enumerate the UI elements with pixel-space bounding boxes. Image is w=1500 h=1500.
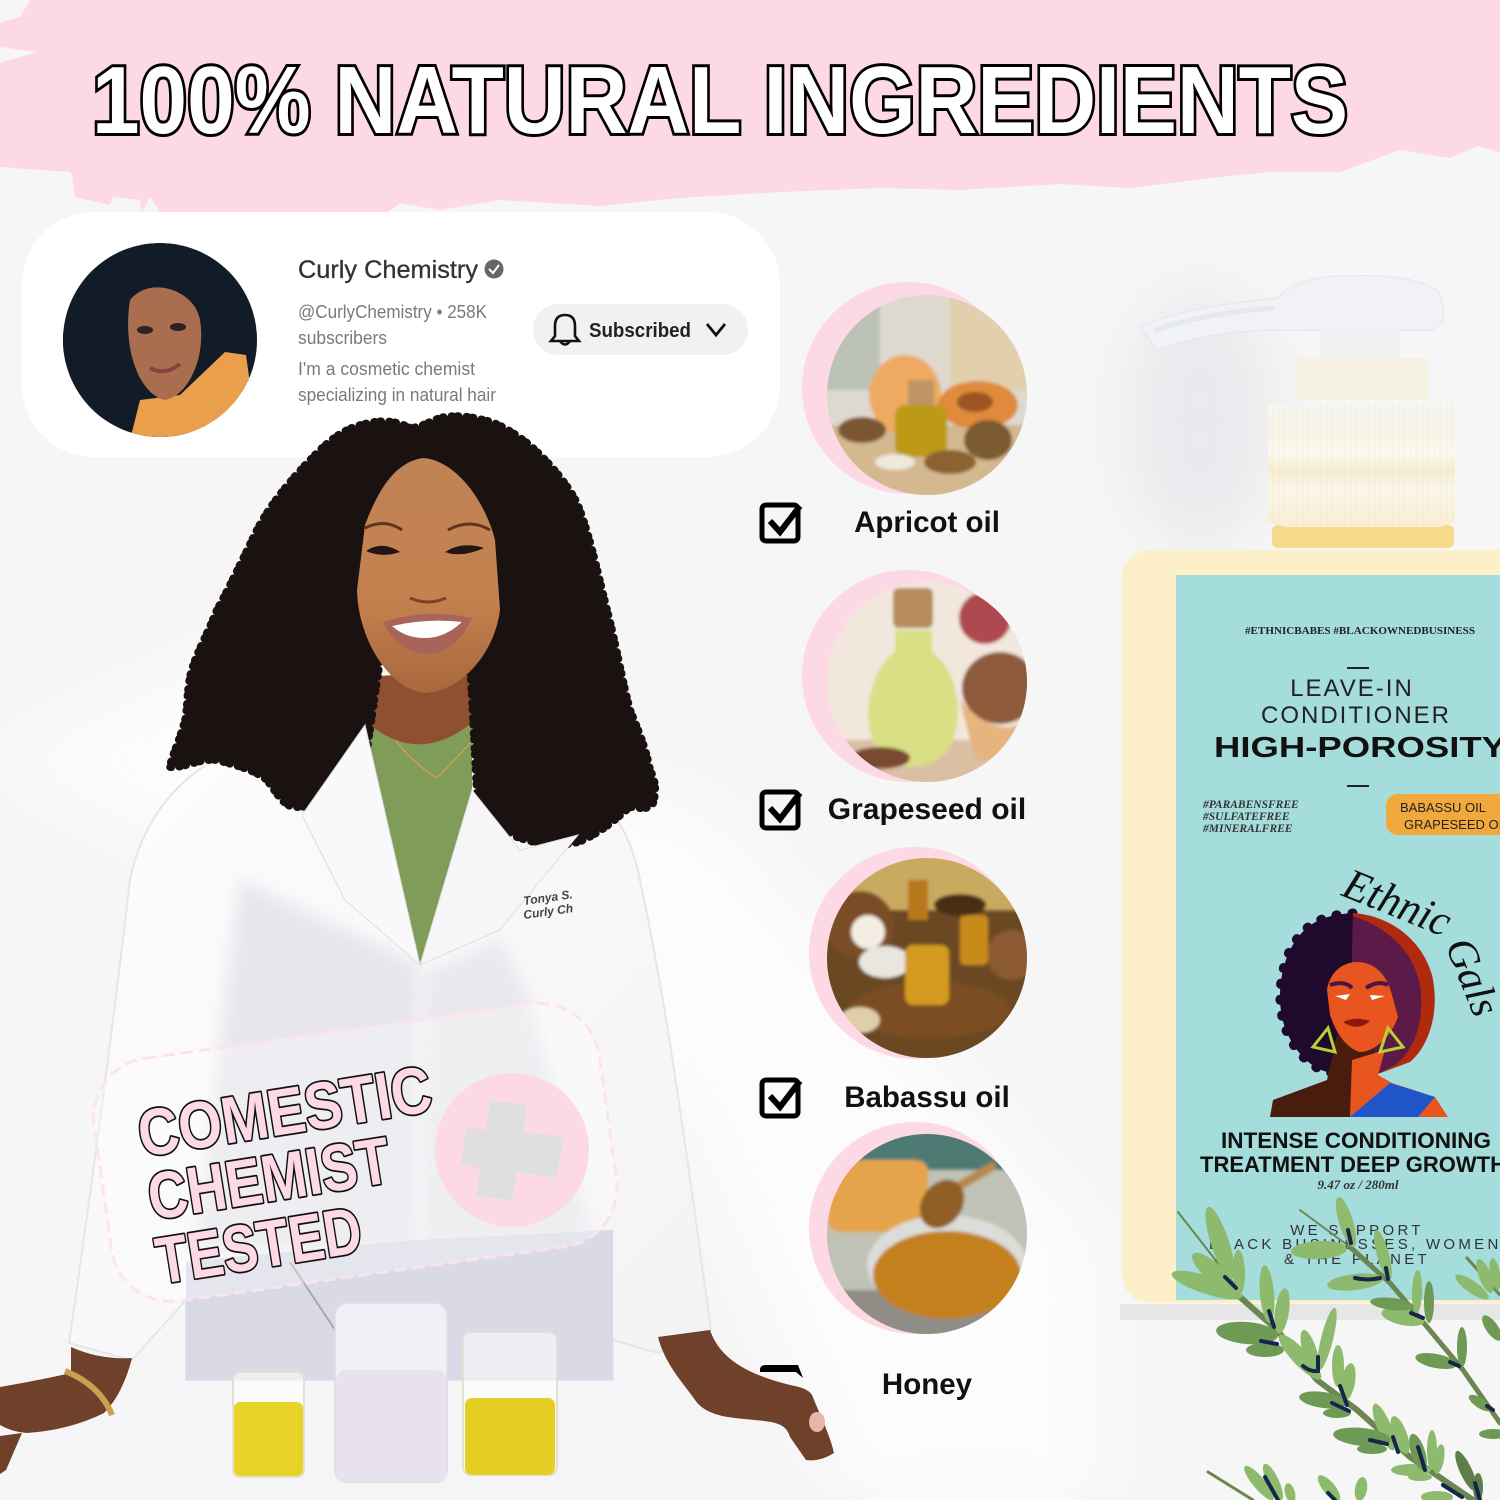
checkbox xyxy=(762,505,800,541)
badge text xyxy=(133,1051,437,1298)
dark leaves xyxy=(1215,1281,1500,1500)
label panel: & THE PLANET xyxy=(1284,1251,1430,1268)
hair xyxy=(170,416,655,845)
badge text: TESTED xyxy=(151,1192,367,1298)
plant: olive branches xyxy=(1169,1195,1500,1500)
label panel: CONDITIONER xyxy=(1261,702,1451,729)
ingredient: grapeseed oil xyxy=(762,570,1038,828)
product: leave-in conditioner bottle xyxy=(1122,276,1500,1303)
subscribed button xyxy=(533,304,748,355)
channel description xyxy=(298,302,496,405)
label panel: BABASSU OIL xyxy=(1400,800,1486,815)
channel description: @CurlyChemistry • 258K xyxy=(298,302,487,322)
channel description: I'm a cosmetic chemist xyxy=(298,359,475,379)
badge text: COMESTIC xyxy=(133,1051,437,1171)
badge: cosmetic chemist tested xyxy=(86,996,625,1309)
label panel: #SULFATEFREE xyxy=(1202,811,1290,823)
label: Honey xyxy=(882,1368,973,1401)
label panel xyxy=(1176,575,1500,1300)
label: Grapeseed oil xyxy=(828,793,1026,826)
checkbox (partly hidden) xyxy=(760,1365,803,1378)
label panel: #MINERALFREE xyxy=(1202,823,1293,835)
label panel: Ethnic xyxy=(1335,858,1459,946)
checkbox xyxy=(762,792,800,828)
subscribed button: Subscribed xyxy=(589,320,691,342)
channel name: Curly Chemistry xyxy=(298,256,479,284)
avatar: Curly Chemistry xyxy=(59,240,260,440)
coat embroidery: Curly Ch xyxy=(522,901,574,922)
panel: YouTube channel card xyxy=(22,212,780,457)
label panel: INTENSE CONDITIONING xyxy=(1221,1128,1491,1153)
label: Apricot oil xyxy=(854,506,1000,539)
label panel: #PARABENSFREE xyxy=(1202,799,1299,811)
badge text: CHEMIST xyxy=(143,1123,395,1234)
right hand xyxy=(658,1330,834,1460)
beakers xyxy=(233,1303,557,1482)
necklace xyxy=(395,740,473,778)
ingredient: apricot oil xyxy=(762,282,1030,541)
coat embroidery: Tonya S. xyxy=(522,887,574,908)
title: 100% NATURAL INGREDIENTS xyxy=(92,47,1348,154)
photo: cosmetic chemist woman xyxy=(0,416,834,1500)
channel description: specializing in natural hair xyxy=(298,385,496,405)
pump xyxy=(1140,276,1455,548)
label panel: BLACK BUSINESSES, WOMEN xyxy=(1209,1236,1500,1253)
table xyxy=(0,1375,834,1500)
icon: verified badge xyxy=(484,260,504,278)
illustration: woman with afro xyxy=(1270,913,1448,1117)
channel description: subscribers xyxy=(298,328,387,348)
label panel: WE SUPPORT xyxy=(1290,1222,1424,1239)
face xyxy=(357,458,500,693)
lab coat xyxy=(69,720,711,1380)
navy leaf marks xyxy=(1225,1230,1493,1500)
neck xyxy=(363,670,473,744)
checkbox xyxy=(762,1080,800,1116)
label panel: TREATMENT DEEP GROWTH xyxy=(1200,1152,1500,1177)
light leaves xyxy=(1169,1195,1500,1500)
label panel: HIGH-POROSITY xyxy=(1214,732,1500,764)
bottle body xyxy=(1122,550,1500,1303)
coat embroidery xyxy=(522,887,574,922)
label panel: LEAVE-IN xyxy=(1290,675,1414,702)
coat lapels xyxy=(302,725,420,965)
label panel: 9.47 oz / 280ml xyxy=(1318,1177,1399,1192)
ingredient: babassu oil xyxy=(762,847,1037,1116)
stems xyxy=(1178,1210,1500,1500)
header banner xyxy=(0,0,1500,212)
icon: medical cross xyxy=(435,1073,589,1227)
glass rod xyxy=(290,1262,357,1363)
label: Babassu oil xyxy=(844,1081,1010,1114)
label panel: #ETHNICBABES #BLACKOWNEDBUSINESS xyxy=(1245,626,1475,637)
green top xyxy=(362,715,472,965)
left hand and bracelet xyxy=(0,1347,132,1474)
ingredient: honey xyxy=(760,1122,1030,1401)
